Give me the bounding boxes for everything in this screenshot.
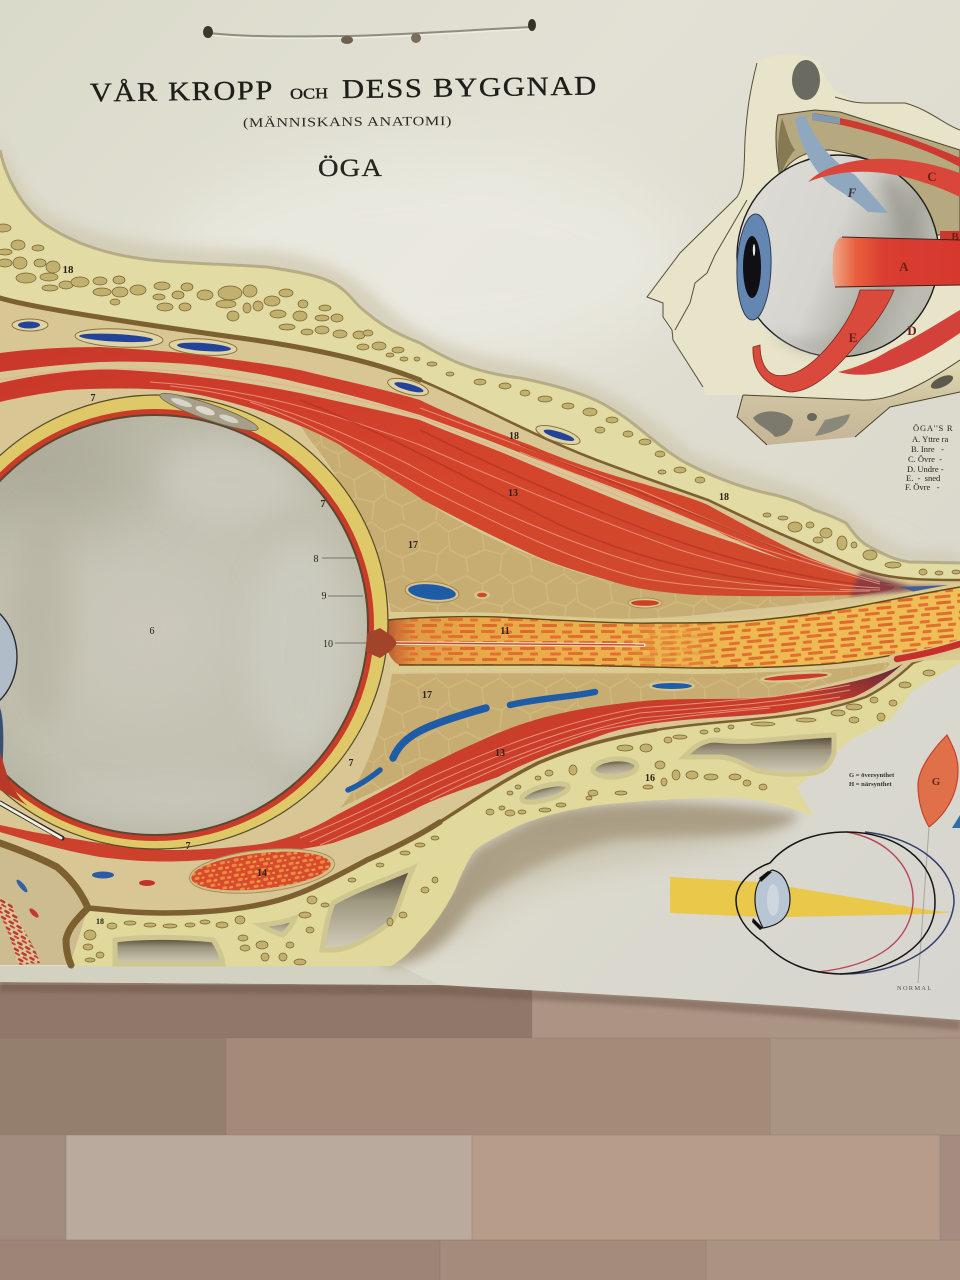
eye lens in diagram [752, 870, 790, 930]
lens G [918, 735, 958, 827]
lens G: G [932, 776, 941, 788]
upper bone [0, 150, 960, 600]
legend: eye muscles: ÖGA''S R [913, 423, 953, 433]
thin upper muscle [0, 347, 892, 585]
myopic outline [840, 832, 954, 974]
muscle D [838, 310, 960, 375]
title: VÅR KROPP [90, 75, 274, 108]
muscle fibre lines [0, 369, 880, 591]
reference numerals: 14 [257, 868, 267, 879]
legend: eye muscles [905, 423, 953, 492]
legend: eye muscles: D. Undre - [907, 464, 944, 474]
muscle E [753, 290, 894, 392]
title: DESS BYGGNAD [342, 70, 598, 104]
muscle D: D [907, 323, 917, 338]
light rays [670, 877, 953, 917]
title [90, 70, 598, 108]
legend: eye muscles: C. Övre - [908, 454, 942, 464]
reference numerals: 9 [322, 591, 326, 602]
spongy bone cells, upper [0, 224, 960, 575]
muscle C: C [927, 169, 937, 184]
iris edge [0, 708, 3, 772]
reference numerals: 7 [348, 758, 354, 769]
muscle F: superior oblique tendon: F [847, 185, 857, 200]
central retinal vessel [389, 643, 644, 645]
lens [0, 601, 17, 713]
inferior rectus muscle [0, 662, 905, 862]
reference numerals: 7 [90, 393, 96, 404]
muscle E: E [849, 330, 857, 345]
optic nerve [385, 580, 960, 674]
hyperopic outline [818, 832, 913, 972]
soft tissue base of orbit [0, 298, 960, 965]
reference numerals: 18 [719, 492, 729, 503]
periosteum lines [0, 298, 960, 965]
reference numerals: 18 [96, 917, 104, 926]
reference numerals: 16 [645, 773, 655, 784]
reference numerals: 7 [320, 499, 326, 510]
hole in the upper bone [792, 60, 820, 100]
fat body above optic nerve [290, 410, 893, 619]
muscle B [940, 231, 960, 246]
muscle B: B [951, 231, 959, 243]
key G and H: G = översynthet [849, 772, 895, 779]
lens H corner [952, 815, 960, 828]
reference numerals: 10 [323, 639, 333, 650]
reference numerals: 6 [150, 626, 154, 637]
reference numerals [62, 264, 729, 926]
legend: eye muscles: E. - sned [906, 473, 941, 483]
reference numerals: 7 [186, 841, 190, 852]
NORMAL label: NORMAL [897, 985, 932, 992]
blood vessels [12, 319, 960, 790]
dark end of muscles at the apex [850, 572, 945, 596]
ciliary band [0, 803, 62, 838]
subtitle: (MÄNNISKANS ANATOMI) [243, 113, 452, 130]
lower orbital wall [737, 360, 960, 445]
hanging cord and grommets [203, 19, 536, 44]
label leader lines [322, 558, 367, 643]
heading: ÖGA: ÖGA [318, 155, 383, 182]
lower bone sinus cavities [115, 735, 834, 964]
optic disc junction [366, 628, 397, 658]
cross-section of the orbit [0, 135, 960, 966]
reference numerals: 17 [422, 690, 432, 701]
iris and pupil [735, 213, 773, 321]
reference numerals: 18 [509, 431, 519, 442]
facial bone [647, 54, 960, 400]
upper rectus muscles [0, 347, 950, 596]
levator and superior rectus [0, 369, 895, 596]
legend: eye muscles: B. Inre - [911, 444, 944, 454]
title: OCH [290, 86, 328, 103]
key G and H [849, 772, 895, 788]
poster sheet [0, 0, 960, 1020]
upper muscle strip [812, 113, 960, 167]
reference numerals: 18 [62, 264, 74, 276]
key G and H: H = närsynthet [849, 781, 892, 788]
eyeball [737, 155, 939, 357]
muscle A [833, 237, 960, 287]
muscle F: superior oblique tendon [795, 115, 888, 213]
lower bone [70, 655, 960, 966]
orbit interior [776, 110, 960, 235]
legend: eye muscles: F. Övre - [905, 482, 940, 492]
reference numerals: 13 [508, 488, 518, 499]
orbital oblique muscle, cross section [187, 842, 337, 900]
fat body below optic nerve [340, 660, 893, 808]
normal eye outline [736, 832, 935, 974]
bone shadows [0, 135, 960, 965]
normal reference line [918, 827, 929, 983]
spongy bone cells, lower [83, 670, 935, 965]
vision diagram [670, 735, 960, 992]
muscle C [808, 159, 960, 197]
side view of eyeball with muscles [647, 54, 960, 445]
muscle A: A [899, 259, 909, 274]
wooden floor [0, 980, 960, 1280]
tear gland [157, 388, 261, 436]
reference numerals: 13 [495, 748, 505, 759]
vitreous body [0, 415, 367, 834]
sclera, choroid and retina of eye [0, 388, 397, 849]
reference numerals: 11 [500, 626, 510, 637]
reference numerals: 8 [314, 554, 318, 565]
reference numerals: 17 [408, 540, 418, 551]
legend: eye muscles: A. Yttre ra [912, 434, 948, 444]
left soft tissue with muscle speckles [0, 843, 155, 965]
